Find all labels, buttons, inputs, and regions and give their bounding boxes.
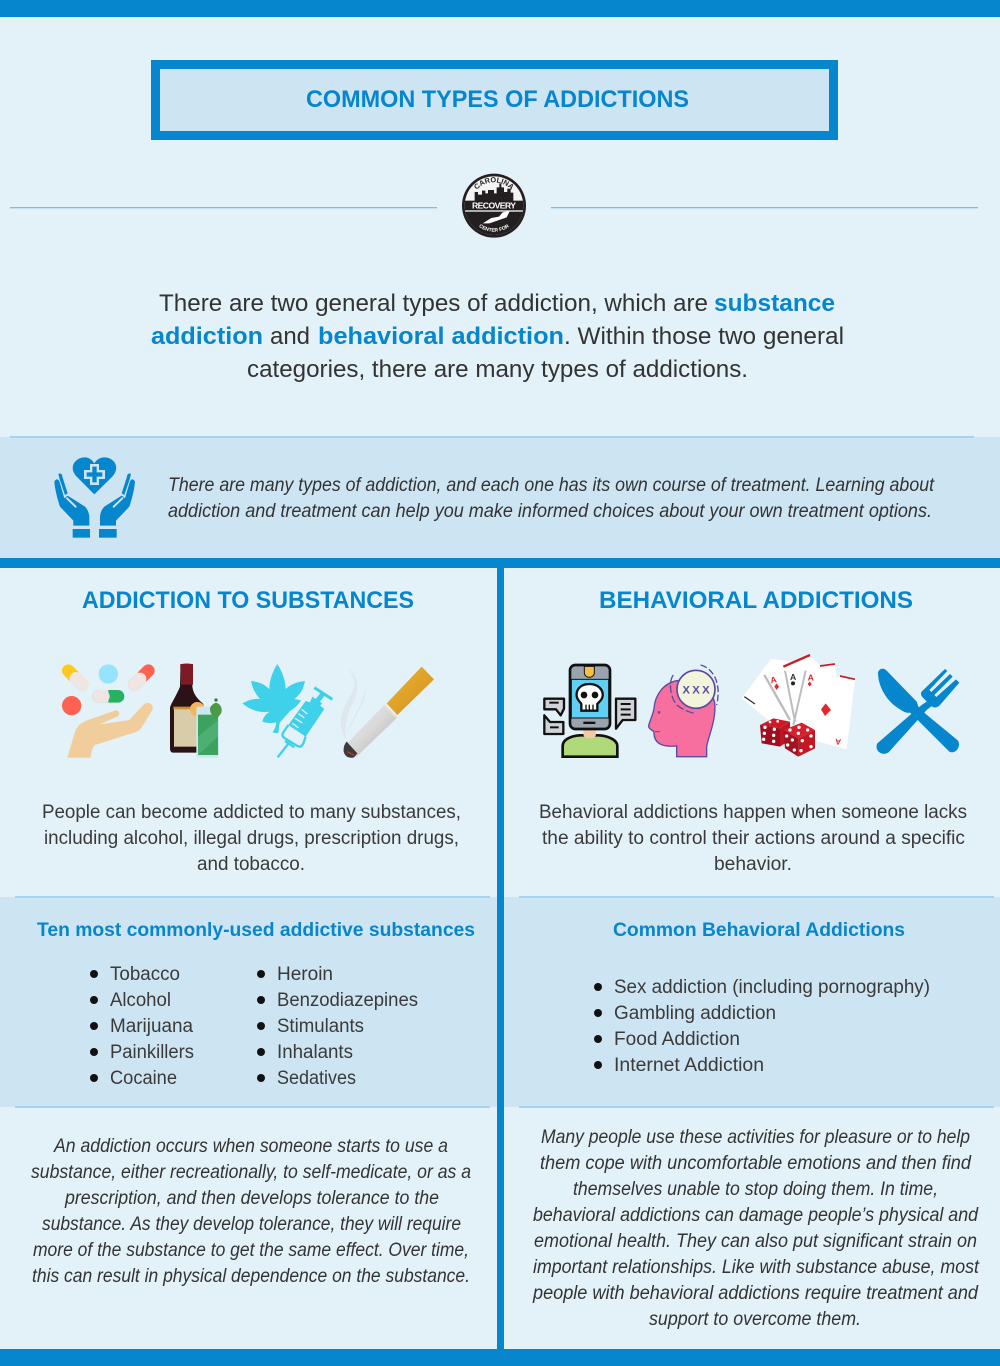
list: substances column two: Stimulants — [277, 1016, 364, 1037]
bottom bar — [0, 1349, 1000, 1366]
panel: behavioral addictions — [504, 587, 1000, 1330]
top bar — [0, 0, 1000, 17]
icon: head with xxx thought — [649, 665, 718, 757]
icon: knife and fork — [877, 669, 959, 754]
list: substances column one — [90, 964, 194, 1089]
panel: ten most commonly-used addictive substances — [0, 897, 497, 1107]
intro text — [151, 290, 844, 383]
text: behavioral description: the ability to control their actions around a specific — [542, 828, 965, 849]
icon: cigarette — [341, 667, 434, 758]
icon: playing cards and dice: A — [808, 673, 815, 683]
list: substances column one: Painkillers — [110, 1042, 194, 1063]
text: behavioral explanation: important relationships. Like with substance abuse, most — [533, 1257, 980, 1278]
list: behavioral addictions — [594, 977, 930, 1076]
list: substances column one: Marijuana — [110, 1016, 193, 1037]
text: substances description: and tobacco. — [197, 854, 305, 875]
panel: common behavioral addictions — [504, 897, 1000, 1107]
list: behavioral addictions: Gambling addiction — [614, 1003, 776, 1024]
list: substances column one: Cocaine — [110, 1068, 177, 1089]
text: substance explanation: prescription, and then develops tolerance to the — [64, 1188, 439, 1209]
text: behavioral description — [539, 802, 967, 875]
panel: treatment note — [0, 437, 1000, 559]
intro text: and — [270, 323, 310, 350]
text: substance explanation: this can result in physical dependence on the substance. — [32, 1266, 470, 1287]
intro text: behavioral addiction — [318, 323, 564, 350]
logo: Carolina Center for Recovery: CENTER FOR — [480, 224, 509, 232]
panel: treatment note: There are many types of addiction, and each one has its own course of treatment. Learning about — [168, 475, 935, 496]
intro text: There are two general types of addiction, which are — [159, 290, 708, 317]
horizontal divider bar — [0, 558, 1000, 568]
list: substances column one: Alcohol — [110, 990, 171, 1011]
icon: playing cards and dice: A — [835, 737, 841, 746]
icon: head with xxx thought: XXX — [682, 684, 710, 696]
intro text: categories, there are many types of addictions. — [247, 356, 748, 383]
icon: playing cards and dice: A — [790, 672, 797, 682]
heading: addiction to substances: ADDICTION TO SUBSTANCES — [82, 587, 414, 614]
panel: addiction to substances — [0, 587, 497, 1287]
list: behavioral addictions: Internet Addiction — [614, 1055, 764, 1076]
intro text: substance — [714, 290, 835, 317]
intro text: addiction — [151, 323, 263, 350]
icon: hands holding heart — [54, 457, 135, 538]
list: substances column two: Benzodiazepines — [277, 990, 418, 1011]
logo: Carolina Center for Recovery — [462, 174, 526, 238]
text: substances description: People can become addicted to many substances, — [42, 802, 461, 823]
text: substance explanation: more of the substance to get the same effect. Over time, — [33, 1240, 469, 1261]
list: substances column two: Sedatives — [277, 1068, 356, 1089]
text: behavioral explanation: themselves unable to stop doing them. In time, — [573, 1179, 938, 1200]
panel: treatment note: addiction and treatment can help you make informed choices about your own treatment options. — [168, 501, 932, 522]
icon: playing cards and dice — [742, 654, 855, 757]
icon: hand with pills — [62, 664, 153, 758]
title box — [156, 64, 834, 136]
text: behavioral explanation — [532, 1127, 980, 1330]
logo: Carolina Center for Recovery: CAROLINA — [474, 177, 514, 190]
text: behavioral explanation: Many people use these activities for pleasure or to help — [541, 1127, 970, 1148]
icon: liquor bottle and cocktail — [170, 664, 222, 758]
list: substances column two: Inhalants — [277, 1042, 353, 1063]
text: behavioral explanation: behavioral addictions can damage people’s physical and — [533, 1205, 979, 1226]
text: substances description — [42, 802, 461, 875]
text: behavioral explanation: support to overcome them. — [649, 1309, 861, 1330]
list: substances column one: Tobacco — [110, 964, 180, 985]
icon: phone with skull — [544, 665, 635, 757]
panel: common behavioral addictions: Common Behavioral Addictions — [613, 920, 905, 941]
text: substance explanation: substance. As they develop tolerance, they will require — [42, 1214, 461, 1235]
panel: ten most commonly-used addictive substances: Ten most commonly-used addictive substances — [37, 920, 475, 941]
text: substance explanation — [31, 1136, 471, 1287]
logo: Carolina Center for Recovery: RECOVERY — [472, 201, 516, 211]
text: substance explanation: substance, either recreationally, to self-medicate, or as a — [31, 1162, 471, 1183]
vertical divider bar — [497, 568, 504, 1349]
text: behavioral explanation: them cope with uncomfortable emotions and then find — [540, 1153, 972, 1174]
text: behavioral explanation: emotional health. They can also put significant strain on — [534, 1231, 977, 1252]
intro text: . Within those two general — [564, 323, 844, 350]
text: substance explanation: An addiction occurs when someone starts to use a — [53, 1136, 448, 1157]
title box: COMMON TYPES OF ADDICTIONS — [306, 86, 689, 113]
text: behavioral description: Behavioral addictions happen when someone lacks — [539, 802, 967, 823]
list: behavioral addictions: Sex addiction (including pornography) — [614, 977, 930, 998]
list: behavioral addictions: Food Addiction — [614, 1029, 740, 1050]
text: behavioral description: behavior. — [714, 854, 792, 875]
icon: cannabis leaf and syringe — [242, 664, 332, 757]
icon: playing cards and dice: A — [769, 674, 778, 685]
text: behavioral explanation: people with behavioral addictions require treatment and — [532, 1283, 979, 1304]
list: substances column two: Heroin — [277, 964, 333, 985]
text: substances description: including alcohol, illegal drugs, prescription drugs, — [44, 828, 459, 849]
heading: behavioral addictions: BEHAVIORAL ADDICTIONS — [599, 587, 913, 614]
list: substances column two — [257, 964, 418, 1089]
